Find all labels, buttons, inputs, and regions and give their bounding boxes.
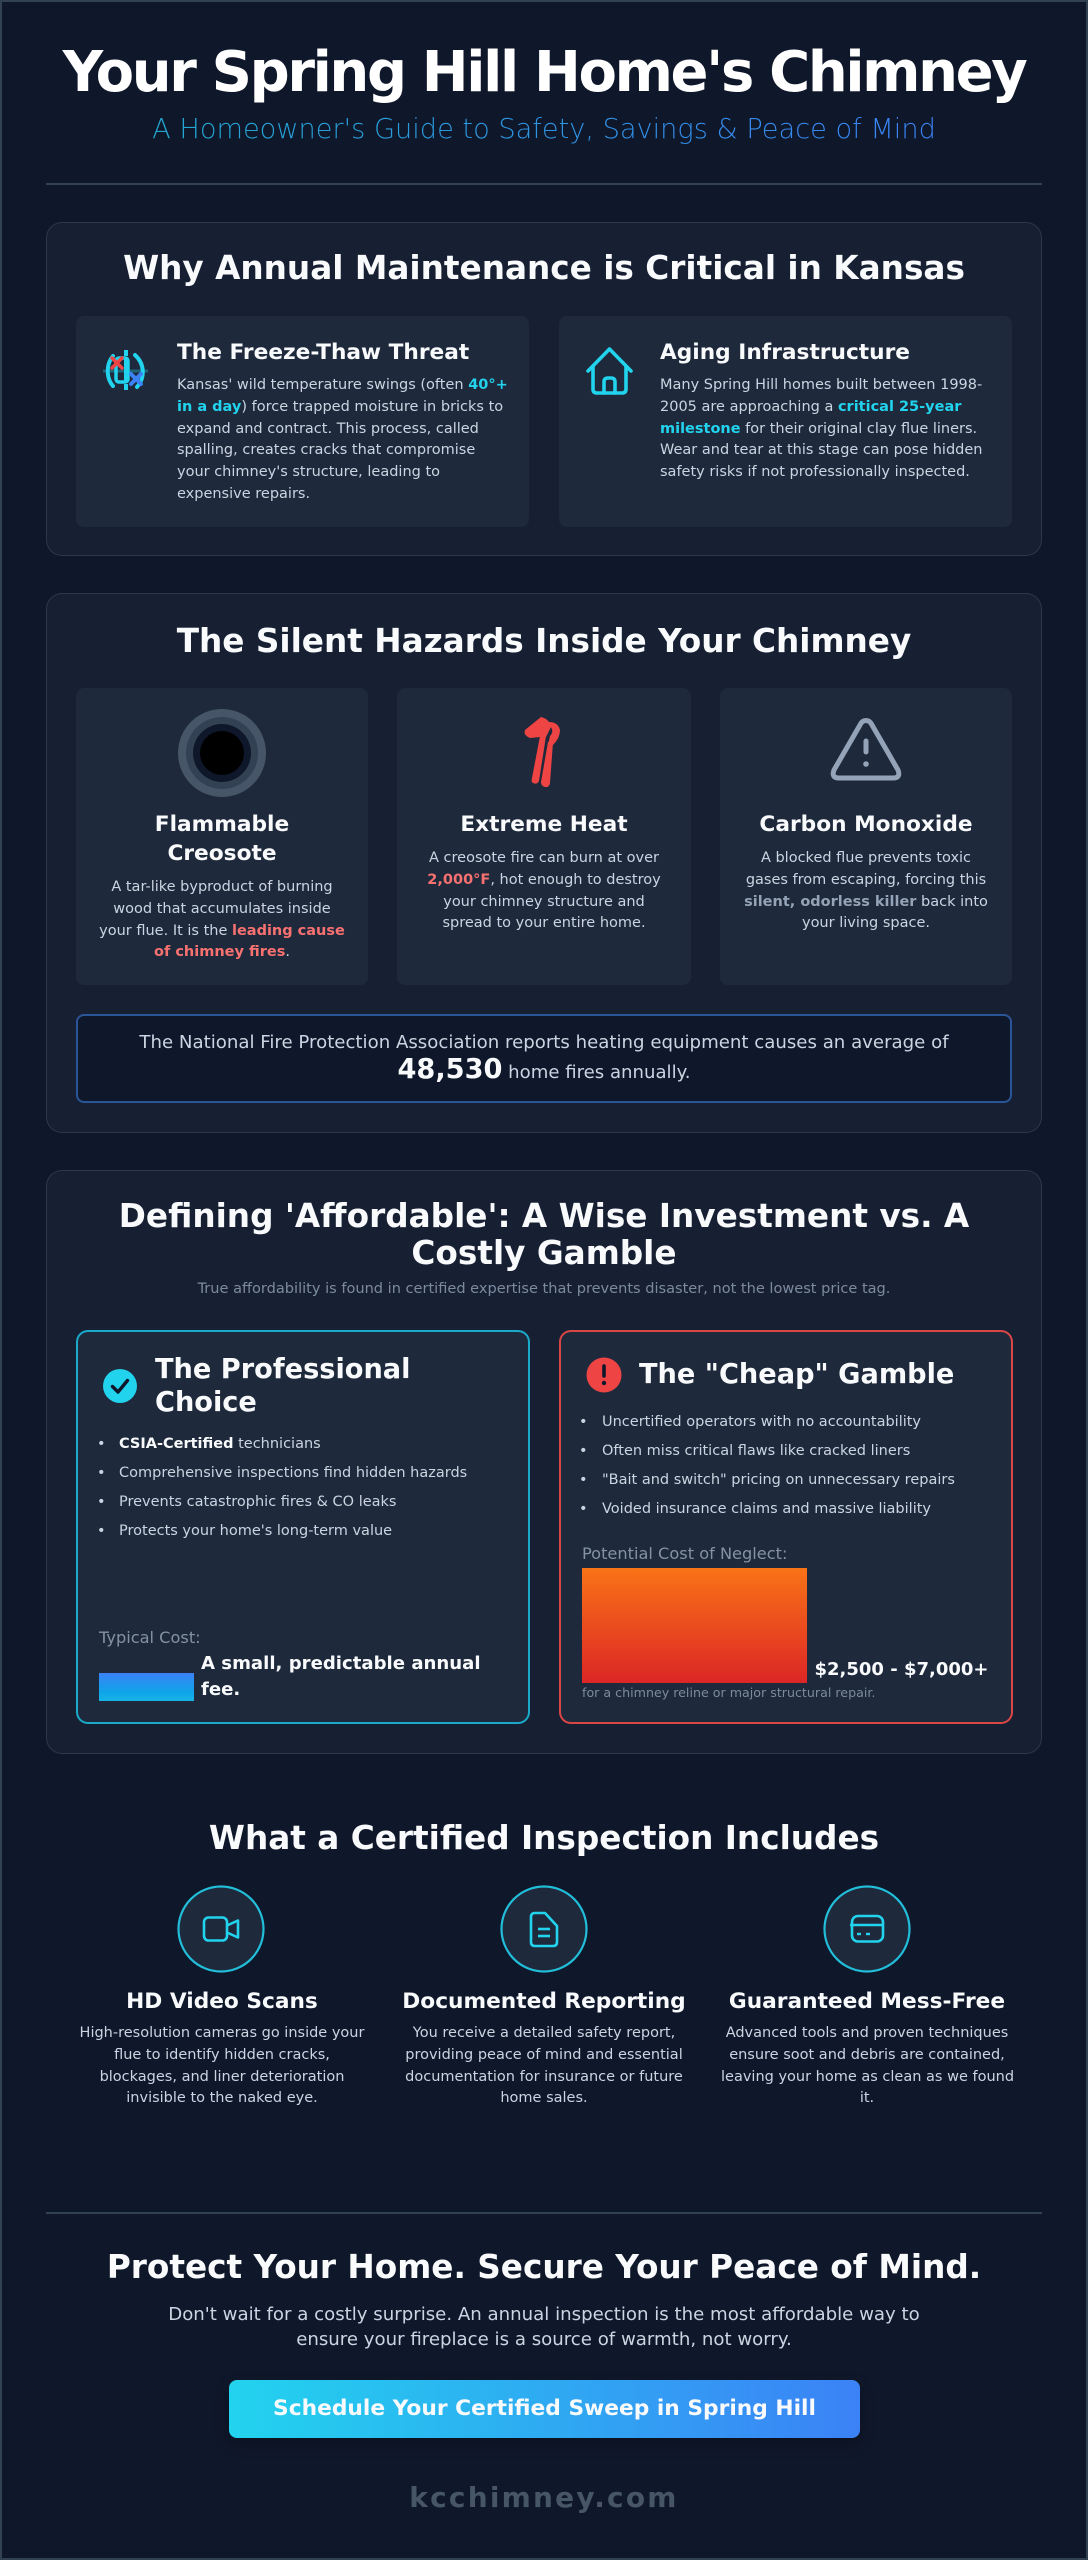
text: creosote — [99, 879, 345, 960]
text: aging: safety risks if not professionally inspected. — [660, 464, 970, 480]
card: professional choice: Prevents catastrophic fires & CO leaks — [119, 1494, 396, 1510]
text: price note: for a chimney reline or major structural repair. — [582, 1685, 875, 1700]
card: cheap gamble: Voided insurance claims and massive liability — [602, 1501, 931, 1517]
text: freeze-thaw — [177, 377, 508, 502]
text: extreme heat — [427, 850, 661, 931]
heading: protect your home: Protect Your Home. Secure Your Peace of Mind. — [107, 2248, 981, 2286]
card: cheap gamble: Often miss critical flaws like cracked liners — [602, 1443, 910, 1459]
card: professional choice: • — [97, 1464, 106, 1480]
card: professional choice: Comprehensive inspections find hidden hazards — [119, 1465, 467, 1481]
card: professional choice: Protects your home's long-term value — [119, 1523, 392, 1539]
text: creosote: A tar-like byproduct of burning — [111, 879, 333, 895]
heading: creosote: Flammable — [155, 812, 289, 837]
panel: silent hazards — [46, 593, 1042, 1133]
item: mess-free — [721, 1885, 1014, 2106]
card: cheap gamble — [559, 1330, 1013, 1724]
text: mess-free — [721, 2025, 1014, 2106]
heading: creosote: Creosote — [167, 841, 277, 866]
section: certified inspection — [80, 1819, 1014, 2106]
text: call to action — [168, 2304, 920, 2350]
text: typical cost value: fee. — [201, 1679, 240, 1700]
text: mess-free: ensure soot and debris are contained, — [729, 2047, 1005, 2063]
icon: alert — [586, 1358, 622, 1392]
callout: NFPA statistic — [76, 1014, 1012, 1103]
heading: mess-free: Guaranteed Mess-Free — [729, 1988, 1005, 2014]
text: typical cost value — [201, 1653, 481, 1700]
text: aging: 2005 are approaching a critical 25-year — [660, 399, 961, 415]
text: documented: documentation for insurance or future — [405, 2069, 683, 2085]
card: carbon monoxide — [720, 688, 1012, 985]
text: creosote: of chimney fires. — [154, 944, 290, 960]
text: aging: Many Spring Hill homes built between 1998- — [660, 377, 982, 393]
text: video: High-resolution cameras go inside your — [80, 2025, 364, 2041]
heading: documented: Documented Reporting — [402, 1988, 686, 2014]
heading: defining affordable — [119, 1197, 969, 1272]
bar: potential cost — [582, 1568, 807, 1683]
text: video: blockages, and liner deterioration — [100, 2069, 344, 2085]
icon: shield card — [823, 1885, 911, 1973]
text: carbon monoxide: gases from escaping, forcing this — [746, 872, 986, 888]
text: creosote: your flue. It is the leading cause — [99, 923, 345, 939]
card: cheap gamble: "Bait and switch" pricing on unnecessary repairs — [602, 1472, 955, 1488]
list: cheap risks — [579, 1414, 955, 1517]
text: freeze-thaw: in a day) force trapped moisture in bricks to — [177, 399, 503, 415]
text: mess-free: Advanced tools and proven techniques — [726, 2025, 1008, 2041]
list: professional benefits — [97, 1436, 467, 1539]
text: call to action: ensure your fireplace is a source of warmth, not worry. — [296, 2329, 792, 2350]
icon: warning triangle — [830, 718, 902, 780]
heading: video: HD Video Scans — [126, 1988, 318, 2014]
section: call to action — [107, 2248, 981, 2514]
icon: document — [500, 1885, 588, 1973]
text: documented: You receive a detailed safety report, — [413, 2025, 675, 2041]
panel: defining affordable — [46, 1170, 1042, 1754]
heading: certified inspection: What a Certified Inspection Includes — [209, 1819, 879, 1857]
card: aging infrastructure — [559, 316, 1012, 527]
card: cheap gamble: • — [579, 1414, 588, 1430]
text: aging: milestone for their original clay flue liners. — [660, 421, 977, 437]
text: documented: home sales. — [500, 2090, 588, 2106]
text: extreme heat: spread to your entire home. — [442, 915, 646, 931]
text: carbon monoxide — [744, 850, 988, 931]
text: extreme heat: 2,000°F, hot enough to destroy — [427, 872, 661, 888]
text: documented: providing peace of mind and essential — [405, 2047, 683, 2063]
heading: creosote — [155, 812, 289, 866]
text: freeze-thaw: Kansas' wild temperature swings (often 40°+ — [177, 377, 508, 393]
icon: flame — [524, 717, 560, 788]
heading: professional: Choice — [155, 1386, 257, 1418]
text: price range: $2,500 - $7,000+ — [814, 1659, 989, 1680]
text: aging — [660, 377, 982, 480]
card: freeze-thaw threat — [76, 316, 529, 527]
text: freeze-thaw: your chimney's structure, leading to — [177, 464, 440, 480]
text: aging: Wear and tear at this stage can pose hidden — [660, 442, 982, 458]
heading: cheap gamble: The "Cheap" Gamble — [639, 1358, 954, 1390]
heading: why annual maintenance: Why Annual Maintenance is Critical in Kansas — [123, 249, 965, 287]
text: website: kcchimney.com — [409, 2481, 679, 2514]
icon: creosote flue — [178, 709, 266, 797]
heading: defining affordable: Defining 'Affordable': A Wise Investment vs. A — [119, 1197, 969, 1235]
text: video — [80, 2025, 364, 2106]
text: carbon monoxide: your living space. — [802, 915, 930, 931]
heading: defining affordable: Costly Gamble — [411, 1234, 677, 1272]
card: professional choice — [76, 1330, 530, 1724]
text: freeze-thaw: expensive repairs. — [177, 486, 310, 502]
card: cheap gamble: • — [579, 1500, 588, 1516]
text: call to action: Don't wait for a costly surprise. An annual inspection is the most affordable way to — [168, 2304, 920, 2325]
text: extreme heat: your chimney structure and — [443, 894, 645, 910]
heading: freeze-thaw: The Freeze-Thaw Threat — [177, 340, 469, 364]
label: potential cost: Potential Cost of Neglect: — [582, 1544, 787, 1563]
button: schedule sweep: Schedule Your Certified Sweep in Spring Hill — [273, 2396, 816, 2421]
label: typical cost: Typical Cost: — [99, 1628, 201, 1647]
icon: check — [103, 1369, 137, 1403]
card: cheap gamble: • — [579, 1472, 588, 1488]
text: carbon monoxide: A blocked flue prevents toxic — [761, 850, 971, 866]
item: documented reporting — [402, 1885, 686, 2106]
heading: aging: Aging Infrastructure — [660, 340, 910, 364]
heading: silent hazards: The Silent Hazards Inside Your Chimney — [177, 622, 911, 660]
text: documented — [405, 2025, 683, 2106]
icon: house — [586, 347, 633, 395]
text: affordable subtitle: True affordability is found in certified expertise that prevents disaster, not the lowest price tag. — [198, 1280, 890, 1297]
heading: professional — [155, 1354, 410, 1418]
card: extreme heat — [397, 688, 691, 985]
text: extreme heat: A creosote fire can burn at over — [429, 850, 659, 866]
bar: typical cost — [99, 1673, 194, 1701]
text: freeze-thaw: expand and contract. This process, called — [177, 421, 479, 437]
card: creosote — [76, 688, 368, 985]
text: typical cost value: A small, predictable annual — [201, 1653, 481, 1674]
subtitle: A Homeowner's Guide to Safety, Savings & Peace of Mind — [152, 114, 936, 145]
card: professional choice: • — [97, 1436, 106, 1452]
heading: carbon monoxide: Carbon Monoxide — [759, 812, 973, 837]
card: cheap gamble: • — [579, 1442, 588, 1458]
text: callout line 1: The National Fire Protection Association reports heating equipment causes an average of — [139, 1032, 949, 1053]
card: professional choice: • — [97, 1494, 106, 1510]
heading: professional: The Professional — [155, 1354, 410, 1384]
item: video scans — [80, 1885, 364, 2106]
icon: video camera — [177, 1885, 265, 1973]
panel: why annual maintenance — [46, 222, 1042, 556]
text: mess-free: it. — [860, 2090, 874, 2106]
card: professional choice: • — [97, 1522, 106, 1538]
button: schedule sweep — [229, 2380, 860, 2438]
text: creosote: wood that accumulates inside — [113, 901, 331, 917]
text: video: flue to identify hidden cracks, — [114, 2047, 330, 2063]
card: professional choice: CSIA-Certified technicians — [119, 1436, 321, 1452]
card: cheap gamble: Uncertified operators with no accountability — [602, 1414, 921, 1430]
icon: freeze-thaw — [103, 350, 148, 390]
text: callout line 2: 48,530 home fires annually. — [398, 1054, 690, 1085]
title: Your Spring Hill Home's Chimney — [63, 40, 1025, 105]
text: video: invisible to the naked eye. — [126, 2090, 318, 2106]
text: freeze-thaw: spalling, creates cracks that compromise — [177, 442, 475, 458]
heading: extreme heat: Extreme Heat — [460, 812, 628, 837]
text: mess-free: leaving your home as clean as we found — [721, 2069, 1014, 2085]
text: carbon monoxide: silent, odorless killer back into — [744, 894, 988, 910]
